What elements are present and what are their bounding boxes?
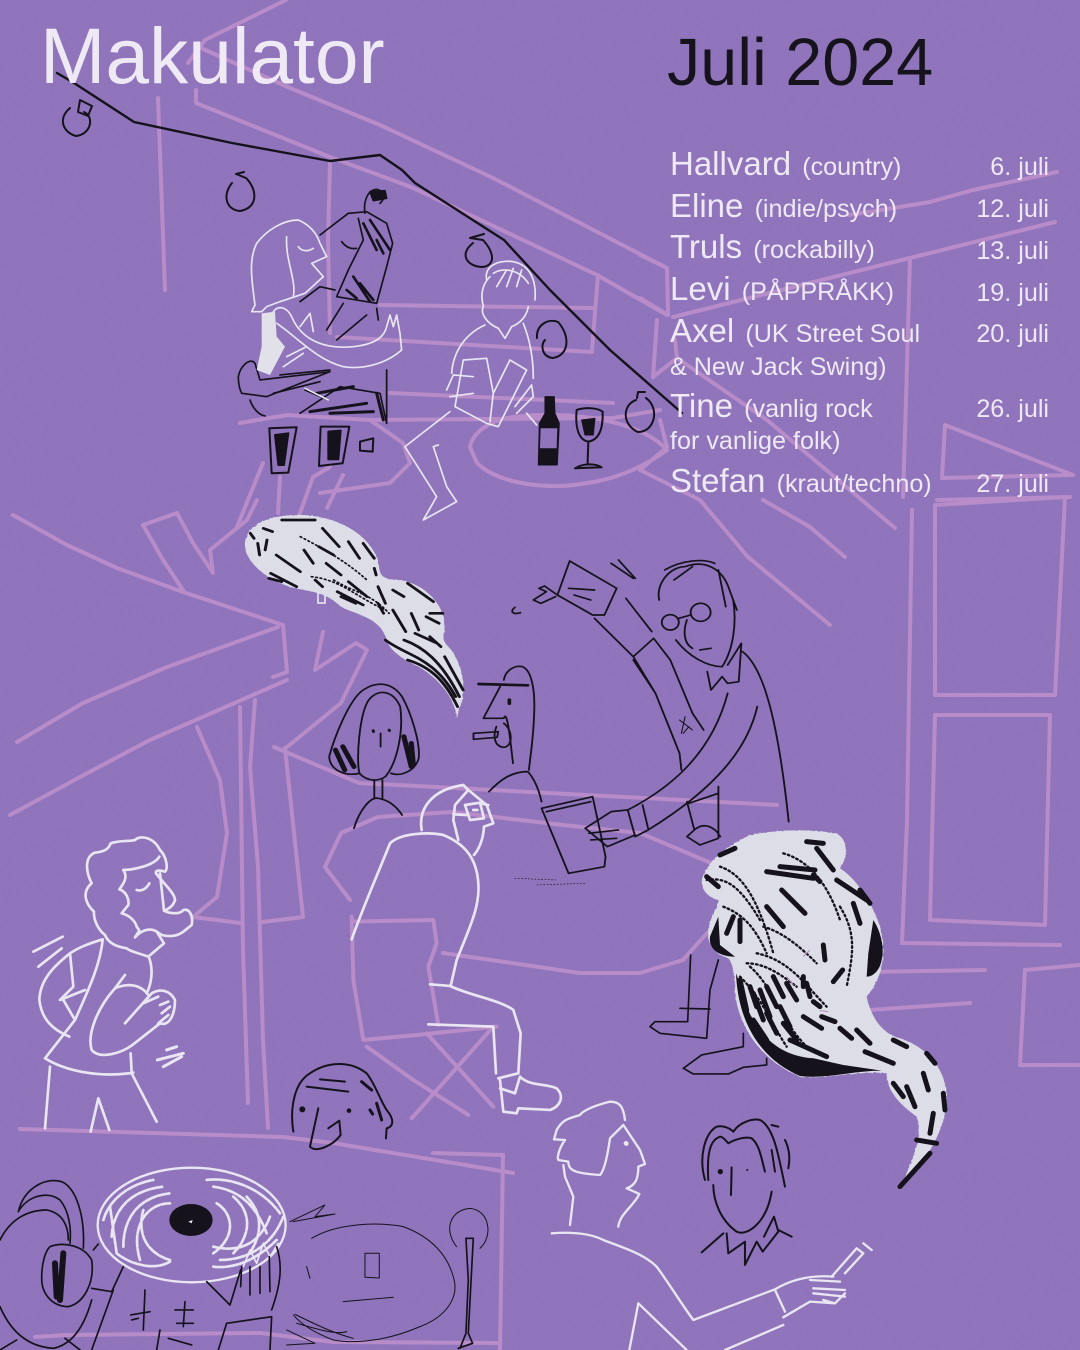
light bulb 5 bbox=[626, 392, 654, 432]
event: Tine bbox=[670, 387, 1049, 455]
cloud hatching bbox=[250, 520, 463, 707]
event: Levi bbox=[670, 270, 1049, 307]
light bulb 2 bbox=[226, 172, 254, 211]
reader with book bbox=[405, 261, 537, 520]
poster title: Makulator bbox=[40, 12, 385, 100]
vinyl record bbox=[98, 1168, 286, 1282]
event: Axel: & New Jack Swing) bbox=[670, 353, 887, 381]
event: Truls bbox=[670, 228, 1049, 265]
cloud hatching bbox=[707, 842, 945, 1187]
string of lights bbox=[57, 73, 682, 432]
event: Stefan bbox=[670, 462, 1049, 499]
event: Truls: 13. juli bbox=[976, 237, 1049, 265]
light bulb 1 bbox=[63, 100, 92, 136]
light bulb 3 bbox=[466, 234, 492, 267]
event: Hallvard: Hallvard (country) bbox=[670, 145, 901, 182]
couple dancing bbox=[238, 189, 402, 473]
event: Axel: Axel (UK Street Soul bbox=[670, 312, 920, 349]
event: Axel bbox=[670, 312, 1049, 381]
bartender pouring bbox=[512, 560, 789, 885]
beer glass bbox=[542, 797, 606, 873]
black figure bbox=[238, 189, 393, 423]
smoke cloud bbox=[245, 515, 463, 718]
grooves bbox=[103, 1179, 283, 1267]
glasses on table bbox=[269, 427, 373, 473]
man with cigarette in white bbox=[552, 1102, 872, 1350]
torso and arm bbox=[707, 643, 789, 822]
black under-mass bbox=[710, 917, 883, 1077]
small glass behind smoke bbox=[318, 593, 325, 603]
seated man in white bbox=[352, 785, 561, 1113]
chair under seated man bbox=[352, 917, 497, 1118]
cloud speckle bbox=[300, 537, 389, 613]
event: Stefan: 27. juli bbox=[976, 470, 1049, 498]
big smoke cloud bbox=[702, 830, 947, 1190]
tipped glass bbox=[533, 561, 617, 615]
event: Tine: for vanlige folk) bbox=[670, 427, 840, 455]
poster month: Juli 2024 bbox=[667, 26, 933, 100]
event: Eline: 12. juli bbox=[976, 195, 1049, 223]
event: Levi: 19. juli bbox=[976, 279, 1049, 307]
cloud fill bbox=[245, 515, 463, 718]
seated figure's legs behind cloud bbox=[650, 955, 767, 1074]
event: Tine: 26. juli bbox=[976, 395, 1049, 423]
event list bbox=[670, 145, 1049, 499]
DJ with headphones and hand bbox=[0, 1181, 488, 1350]
head and glasses bbox=[659, 561, 737, 610]
event: Eline: Eline (indie/psych) bbox=[670, 187, 897, 224]
dancing person bbox=[33, 837, 192, 1132]
event: Axel: 20. juli bbox=[976, 320, 1049, 348]
white figure bbox=[251, 220, 402, 400]
cloud fill bbox=[702, 830, 947, 1190]
event: Tine: Tine (vanlig rock bbox=[670, 387, 873, 424]
light bulb 4 bbox=[537, 321, 566, 358]
smoking man bbox=[473, 666, 542, 802]
string wire bbox=[57, 73, 682, 413]
bald man bbox=[292, 1064, 392, 1149]
event: Stefan: Stefan (kraut/techno) bbox=[670, 462, 932, 499]
event: Hallvard: 6. juli bbox=[990, 153, 1049, 181]
event: Levi: Levi (PÅPPRÅKK) bbox=[670, 270, 894, 307]
woman at bar bbox=[329, 684, 419, 828]
event: Hallvard bbox=[670, 145, 1049, 182]
pink show-through bbox=[787, 950, 828, 1012]
man in black with collar bbox=[702, 1120, 792, 1265]
cloud speckle bbox=[707, 853, 852, 1047]
bottle and wine glass bbox=[538, 397, 603, 468]
event: Truls: Truls (rockabilly) bbox=[670, 228, 875, 265]
event: Eline bbox=[670, 187, 1049, 224]
